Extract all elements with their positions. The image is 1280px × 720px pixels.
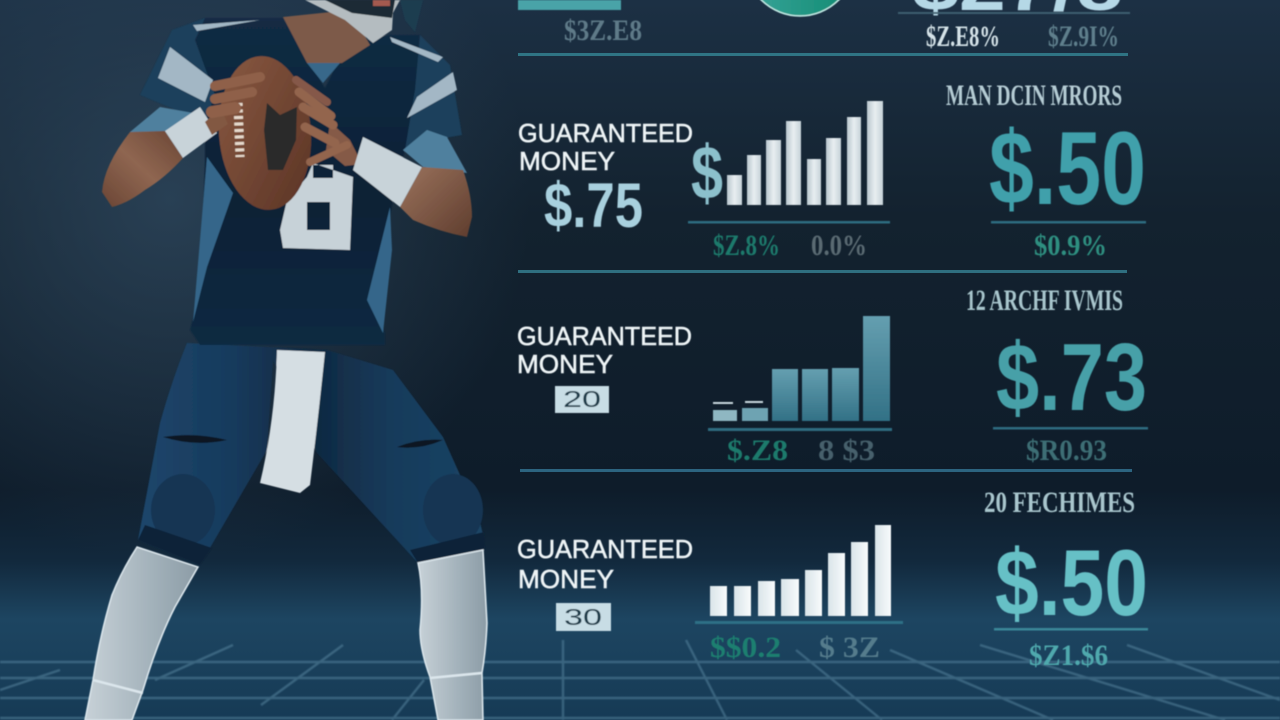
football — [214, 53, 316, 213]
chart figures row 1: 0.0% — [811, 229, 867, 262]
knee pads — [138, 435, 485, 565]
bar chart row 3 — [710, 525, 891, 616]
top center teal circle — [745, 0, 855, 16]
badge 30: 30 — [564, 604, 602, 630]
right figure row 1: $0.9% — [1034, 229, 1107, 262]
badge 20: 20 — [563, 386, 601, 412]
panel: row 1 — [518, 79, 1146, 262]
right amount $.73: $.73 — [996, 324, 1147, 431]
left wristband — [165, 107, 217, 158]
section divider 3 — [520, 469, 1132, 472]
badge 20 — [555, 386, 609, 413]
chart figures row 2: $.Z8 — [727, 434, 788, 467]
towel — [260, 350, 325, 493]
heading: guaranteed money row 3: MONEY — [518, 564, 614, 594]
right hand — [296, 80, 362, 166]
floor grid — [0, 640, 1280, 720]
chart rule row 2 — [708, 428, 892, 431]
right amount $.50: $.50 — [989, 111, 1146, 227]
right forearm — [400, 167, 472, 237]
jersey side panels — [193, 157, 392, 333]
heading: guaranteed money row 2: GUARANTEED — [517, 321, 692, 351]
heading: guaranteed money row 3 — [517, 534, 693, 594]
panel: row 3 — [517, 486, 1148, 672]
top-left figure: $3Z.E8 — [564, 14, 642, 47]
heading: guaranteed money row 2: MONEY — [517, 349, 613, 379]
section divider 2 — [518, 270, 1127, 273]
right wristband — [353, 137, 422, 207]
top figure 3: $Z.9I% — [1048, 20, 1119, 53]
neck — [283, 10, 370, 63]
jersey shoulder stripes — [158, 20, 457, 118]
left hand — [205, 77, 260, 135]
top figure 2: $Z.E8% — [926, 20, 1000, 53]
chart rule row 1 — [688, 221, 890, 224]
panel: row 2 — [517, 284, 1148, 467]
section divider 1 — [518, 53, 1128, 56]
chart figures row 2: 8 $3 — [818, 434, 875, 467]
right amount $.50 row 3: $.50 — [995, 530, 1148, 635]
right rule row 1 — [991, 221, 1146, 224]
badge 30 — [556, 603, 611, 631]
helmet — [305, 0, 423, 43]
jersey sleeves — [140, 18, 462, 150]
quarterback player illustration — [85, 0, 487, 720]
right heading row 3: 20 FECHIMES — [984, 486, 1135, 519]
top-left teal tag — [518, 0, 621, 10]
chart rule row 3 — [695, 621, 903, 624]
left forearm — [102, 131, 183, 207]
top-right rule — [898, 12, 1130, 14]
chart figures row 3: $$0.2 — [710, 631, 781, 664]
heading: guaranteed money row 2 — [517, 321, 692, 379]
jersey — [140, 18, 462, 345]
chart figures row 1: $Z.8% — [713, 229, 780, 262]
bar chart row 2 — [713, 316, 890, 421]
right rule row 3 — [994, 628, 1148, 630]
right heading row 2: 12 ARCHF IVMIS — [966, 284, 1123, 317]
chart figures row 3 — [710, 631, 880, 664]
dollar icon: $ — [691, 131, 723, 216]
collar — [307, 63, 340, 83]
chart figures row 2 — [727, 434, 875, 467]
socks — [85, 547, 487, 720]
heading: guaranteed money row 1 — [518, 118, 693, 176]
chart figures row 1 — [713, 229, 867, 262]
heading: guaranteed money row 3: GUARANTEED — [517, 534, 693, 564]
pants — [138, 343, 485, 565]
chart figures row 3: $ 3Z — [819, 631, 880, 664]
heading: guaranteed money row 1: GUARANTEED — [518, 118, 693, 148]
heading: guaranteed money row 1: MONEY — [519, 146, 615, 176]
right rule row 2 — [993, 427, 1148, 430]
right figure row 3: $Z1.$6 — [1029, 639, 1108, 672]
bar chart row 1 — [727, 101, 883, 205]
number 8 — [280, 163, 353, 250]
right undersleeve — [403, 130, 467, 173]
top row partial — [518, 0, 1130, 53]
right heading row 1: MAN DCIN MRORS — [946, 79, 1122, 112]
amount $.75: $.75 — [544, 171, 643, 241]
left undersleeve — [130, 107, 193, 135]
right figure row 2: $R0.93 — [1026, 434, 1107, 467]
